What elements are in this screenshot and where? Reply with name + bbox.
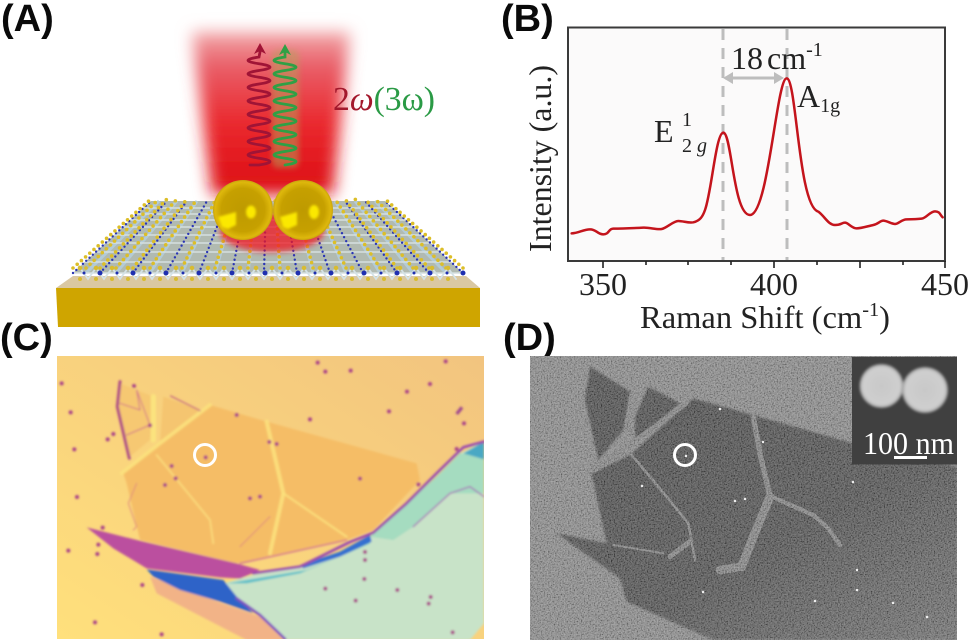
inset: nanoparticle dimer [852, 357, 957, 464]
label: 18 cm-1: 18cm [731, 40, 806, 76]
magenta multilayer [87, 527, 260, 579]
label: E 1 2g: E [654, 113, 674, 149]
panel B: Raman spectrum [522, 28, 969, 335]
gold substrate [56, 276, 480, 327]
label: A1g: A [797, 78, 820, 114]
spectrum curve [572, 78, 943, 234]
label: 18 cm-1: -1 [806, 39, 823, 61]
dashed peak markers [723, 29, 787, 260]
x tick labels: 400 [750, 266, 798, 302]
label: E 1 2g: 1 [682, 109, 692, 131]
flake regions [62, 361, 484, 640]
scale bar [894, 456, 927, 459]
grain noise [530, 356, 957, 640]
label: 2 omega (3 omega): 2ω(3ω) [333, 81, 435, 118]
axis ticks [603, 261, 945, 268]
blue multilayer [147, 569, 253, 613]
white specks [642, 409, 927, 617]
label: A1g: 1g [820, 95, 840, 117]
wave arrow 3 omega [274, 44, 296, 165]
gold nanosphere right [273, 180, 333, 240]
wave arrow 2 omega [248, 43, 270, 165]
flake edges and cracks [117, 382, 484, 639]
red light beam [192, 32, 350, 195]
panel C: optical micrograph [57, 356, 484, 640]
plot frame [568, 28, 945, 261]
lattice of atoms [73, 199, 465, 279]
dimer spheres [860, 364, 948, 413]
scale label: 100 nm [863, 425, 954, 461]
panel D: SEM micrograph [530, 356, 957, 640]
front row atoms [80, 268, 465, 279]
x axis title: ) [879, 299, 890, 335]
plasmon hot spot glow [220, 212, 324, 252]
white marker circle [194, 444, 216, 466]
y axis title: Intensity (a.u.) [522, 65, 558, 252]
gold nanosphere left [213, 180, 273, 240]
x axis title: -1 [862, 299, 879, 321]
x tick labels [579, 266, 969, 302]
cracks [595, 393, 840, 570]
label: panel D: (D) [503, 317, 556, 359]
label: panel C: (C) [0, 317, 53, 359]
x axis title: Raman Shift (cm [640, 299, 859, 335]
panel A: nanoparticle dimer on lattice [56, 32, 480, 327]
x tick labels: 350 [579, 266, 627, 302]
green glow [272, 50, 299, 168]
dark flake regions [557, 367, 957, 640]
label: E 1 2g [654, 109, 707, 157]
background substrate [57, 356, 484, 640]
label: E 1 2g: 2 g [682, 135, 707, 157]
separation arrow [723, 72, 784, 84]
SEM background [530, 356, 957, 640]
white marker circle [674, 444, 696, 466]
contamination specks [62, 361, 464, 634]
x tick labels: 450 [921, 266, 969, 302]
